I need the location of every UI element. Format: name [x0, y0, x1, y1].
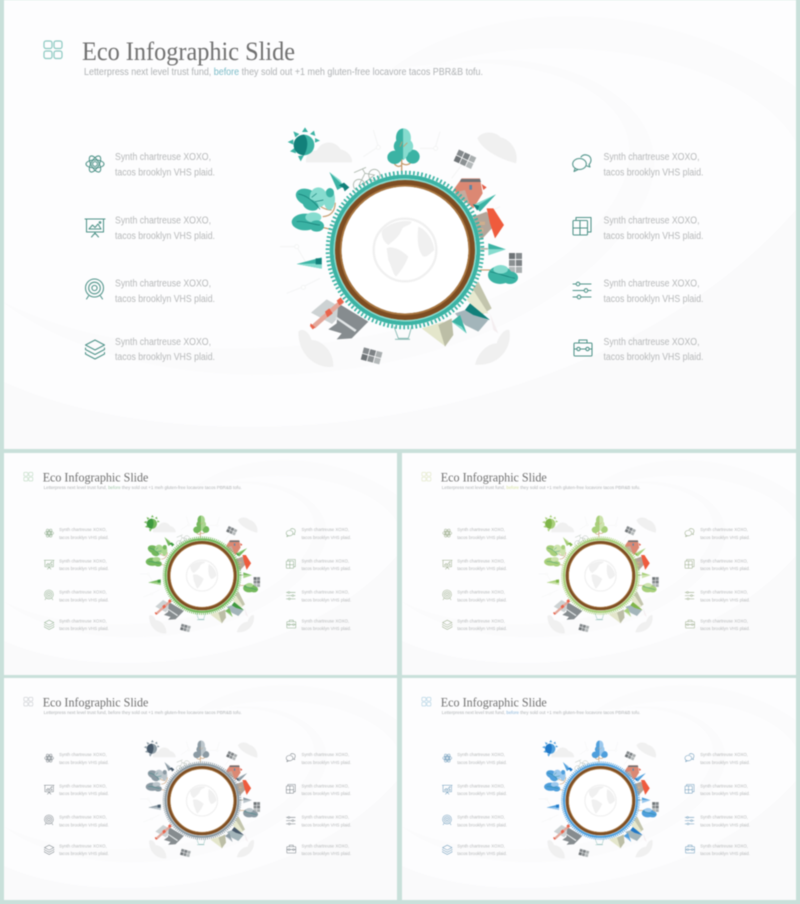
- title: Eco Infographic Slide: [43, 696, 149, 710]
- item: left 4: Synth chartreuse XOXO,: [457, 844, 505, 850]
- item: left 1: tacos brooklyn VHS plaid.: [457, 535, 507, 541]
- panel: lime slide: [402, 452, 796, 676]
- item: left 4: Synth chartreuse XOXO,: [457, 619, 505, 625]
- item: right 1: tacos brooklyn VHS plaid.: [700, 760, 750, 766]
- item: left 4: tacos brooklyn VHS plaid.: [59, 626, 109, 632]
- panel: grey slide: [4, 678, 398, 900]
- item: left 3: tacos brooklyn VHS plaid.: [457, 822, 507, 828]
- item: left 2: tacos brooklyn VHS plaid.: [457, 566, 507, 572]
- panel: blue slide: [402, 678, 796, 900]
- globe illustration: [538, 515, 659, 633]
- panel: green slide: [4, 452, 398, 676]
- icon: logo grid: [24, 697, 33, 706]
- item: right 1: [286, 752, 351, 766]
- item: right 3: tacos brooklyn VHS plaid.: [301, 597, 351, 603]
- item: right 3: tacos brooklyn VHS plaid.: [301, 822, 351, 828]
- item: right 3: Synth chartreuse XOXO,: [700, 590, 748, 596]
- icon: logo grid: [44, 41, 62, 58]
- item: right 1: [573, 152, 704, 178]
- item: left 3: tacos brooklyn VHS plaid.: [59, 822, 109, 828]
- item: right 2: Synth chartreuse XOXO,: [700, 559, 748, 565]
- subtitle: Letterpress next level trust fund, before they sold out +1 meh gluten-free locavore tacos PBR&B tofu.: [44, 485, 242, 491]
- item: right 2: Synth chartreuse XOXO,: [604, 216, 700, 226]
- item: right 2: Synth chartreuse XOXO,: [700, 784, 748, 790]
- subtitle: Letterpress next level trust fund, before they sold out +1 meh gluten-free locavore tacos PBR&B tofu.: [442, 485, 640, 491]
- item: right 4: [287, 844, 351, 857]
- item: left 1: Synth chartreuse XOXO,: [457, 752, 505, 758]
- item: right 1: [286, 527, 351, 541]
- item: left 3: Synth chartreuse XOXO,: [115, 278, 211, 290]
- item: right 2: [286, 784, 351, 797]
- item: left 2: tacos brooklyn VHS plaid.: [59, 566, 109, 572]
- item: left 1: tacos brooklyn VHS plaid.: [115, 168, 215, 178]
- item: left 3: tacos brooklyn VHS plaid.: [457, 597, 507, 603]
- item: left 3: Synth chartreuse XOXO,: [457, 815, 505, 821]
- item: right 2: [286, 559, 351, 572]
- item: right 3: [286, 815, 351, 828]
- item: left 1: [86, 152, 215, 178]
- item: left 2: Synth chartreuse XOXO,: [59, 784, 107, 790]
- item: left 4: Synth chartreuse XOXO,: [59, 844, 107, 850]
- item: right 2: Synth chartreuse XOXO,: [301, 559, 349, 565]
- item: left 4: tacos brooklyn VHS plaid.: [457, 626, 507, 632]
- panel: main teal slide: [4, 0, 796, 450]
- item: left 4: tacos brooklyn VHS plaid.: [457, 851, 507, 857]
- item: left 2: [85, 216, 215, 242]
- item: right 4: tacos brooklyn VHS plaid.: [604, 352, 704, 363]
- item: left 3: Synth chartreuse XOXO,: [59, 590, 107, 596]
- globe illustration: [280, 127, 522, 367]
- item: left 1: Synth chartreuse XOXO,: [115, 152, 211, 163]
- item: right 3: Synth chartreuse XOXO,: [301, 815, 349, 821]
- item: left 4: [443, 844, 507, 857]
- item: left 2: Synth chartreuse XOXO,: [59, 559, 107, 565]
- item: right 1: tacos brooklyn VHS plaid.: [700, 535, 750, 541]
- item: right 3: tacos brooklyn VHS plaid.: [700, 822, 750, 828]
- item: left 3: [86, 278, 215, 305]
- item: right 1: tacos brooklyn VHS plaid.: [301, 760, 351, 766]
- item: left 4: [86, 337, 215, 363]
- item: right 4: Synth chartreuse XOXO,: [301, 844, 349, 850]
- item: left 2: tacos brooklyn VHS plaid.: [59, 791, 109, 797]
- item: left 2: Synth chartreuse XOXO,: [457, 559, 505, 565]
- item: left 4: [44, 844, 109, 857]
- item: left 1: Synth chartreuse XOXO,: [59, 752, 107, 758]
- item: right 1: Synth chartreuse XOXO,: [604, 152, 700, 163]
- item: right 1: Synth chartreuse XOXO,: [301, 752, 349, 758]
- item: right 1: tacos brooklyn VHS plaid.: [604, 168, 704, 178]
- item: left 1: [443, 752, 507, 766]
- item: right 2: tacos brooklyn VHS plaid.: [301, 566, 351, 572]
- item: left 3: tacos brooklyn VHS plaid.: [59, 597, 109, 603]
- globe illustration: [140, 515, 260, 633]
- item: left 3: [443, 815, 507, 828]
- subtitle: Letterpress next level trust fund, before they sold out +1 meh gluten-free locavore tacos PBR&B tofu.: [442, 710, 640, 716]
- item: left 4: [443, 619, 507, 632]
- item: right 1: tacos brooklyn VHS plaid.: [301, 535, 351, 541]
- item: left 2: Synth chartreuse XOXO,: [457, 784, 505, 790]
- item: left 3: Synth chartreuse XOXO,: [457, 590, 505, 596]
- item: left 1: Synth chartreuse XOXO,: [59, 527, 107, 533]
- item: right 2: tacos brooklyn VHS plaid.: [700, 791, 750, 797]
- item: right 2: Synth chartreuse XOXO,: [301, 784, 349, 790]
- item: right 2: [573, 216, 704, 242]
- icon: logo grid: [422, 472, 431, 481]
- item: right 4: tacos brooklyn VHS plaid.: [700, 851, 750, 857]
- item: right 1: [685, 752, 750, 766]
- item: right 4: Synth chartreuse XOXO,: [604, 337, 700, 348]
- item: right 4: tacos brooklyn VHS plaid.: [700, 626, 750, 632]
- item: left 3: [44, 590, 109, 603]
- item: right 1: [685, 527, 750, 541]
- item: left 1: tacos brooklyn VHS plaid.: [457, 760, 507, 766]
- item: left 2: [442, 784, 507, 797]
- item: right 3: tacos brooklyn VHS plaid.: [604, 294, 704, 305]
- item: right 1: Synth chartreuse XOXO,: [700, 527, 748, 533]
- item: right 4: tacos brooklyn VHS plaid.: [301, 851, 351, 857]
- item: right 3: Synth chartreuse XOXO,: [604, 278, 700, 290]
- title: Eco Infographic Slide: [441, 471, 547, 485]
- item: left 1: [45, 527, 109, 541]
- item: right 3: [685, 815, 750, 828]
- item: left 3: [44, 815, 109, 828]
- item: right 2: tacos brooklyn VHS plaid.: [301, 791, 351, 797]
- item: right 2: tacos brooklyn VHS plaid.: [604, 231, 704, 242]
- globe illustration: [140, 740, 260, 858]
- item: left 4: tacos brooklyn VHS plaid.: [59, 851, 109, 857]
- item: right 4: [574, 337, 704, 363]
- item: left 2: [44, 784, 109, 797]
- item: right 4: [686, 619, 750, 632]
- item: right 3: tacos brooklyn VHS plaid.: [700, 597, 750, 603]
- item: right 1: Synth chartreuse XOXO,: [301, 527, 349, 533]
- item: left 3: [443, 590, 507, 603]
- item: left 4: tacos brooklyn VHS plaid.: [115, 352, 215, 363]
- subtitle: Letterpress next level trust fund, before they sold out +1 meh gluten-free locavore tacos PBR&B tofu.: [84, 67, 483, 78]
- item: left 3: tacos brooklyn VHS plaid.: [115, 294, 215, 305]
- item: right 2: tacos brooklyn VHS plaid.: [700, 566, 750, 572]
- item: left 2: [44, 559, 109, 572]
- title: Eco Infographic Slide: [441, 696, 547, 710]
- item: right 2: [685, 784, 750, 797]
- item: right 4: Synth chartreuse XOXO,: [700, 619, 748, 625]
- item: left 2: Synth chartreuse XOXO,: [115, 216, 211, 226]
- item: left 4: [44, 619, 109, 632]
- item: left 1: tacos brooklyn VHS plaid.: [59, 760, 109, 766]
- item: right 4: Synth chartreuse XOXO,: [301, 619, 349, 625]
- item: left 1: [45, 752, 109, 766]
- item: left 1: tacos brooklyn VHS plaid.: [59, 535, 109, 541]
- item: left 4: Synth chartreuse XOXO,: [59, 619, 107, 625]
- item: right 4: [686, 844, 750, 857]
- item: left 2: [442, 559, 507, 572]
- icon: logo grid: [422, 697, 431, 706]
- item: left 3: Synth chartreuse XOXO,: [59, 815, 107, 821]
- item: right 4: [287, 619, 351, 632]
- item: left 2: tacos brooklyn VHS plaid.: [115, 231, 215, 242]
- item: right 3: Synth chartreuse XOXO,: [301, 590, 349, 596]
- item: right 3: [573, 278, 704, 305]
- item: right 3: Synth chartreuse XOXO,: [700, 815, 748, 821]
- item: right 2: [685, 559, 750, 572]
- globe illustration: [538, 740, 659, 858]
- item: left 1: Synth chartreuse XOXO,: [457, 527, 505, 533]
- item: right 4: tacos brooklyn VHS plaid.: [301, 626, 351, 632]
- item: left 1: [443, 527, 507, 541]
- icon: logo grid: [24, 472, 33, 481]
- title: Eco Infographic Slide: [43, 471, 149, 485]
- subtitle: Letterpress next level trust fund, before they sold out +1 meh gluten-free locavore tacos PBR&B tofu.: [44, 710, 242, 716]
- item: right 4: Synth chartreuse XOXO,: [700, 844, 748, 850]
- item: left 2: tacos brooklyn VHS plaid.: [457, 791, 507, 797]
- item: right 1: Synth chartreuse XOXO,: [700, 752, 748, 758]
- title: Eco Infographic Slide: [82, 37, 295, 66]
- item: right 3: [685, 590, 750, 603]
- item: left 4: Synth chartreuse XOXO,: [115, 337, 211, 348]
- item: right 3: [286, 590, 351, 603]
